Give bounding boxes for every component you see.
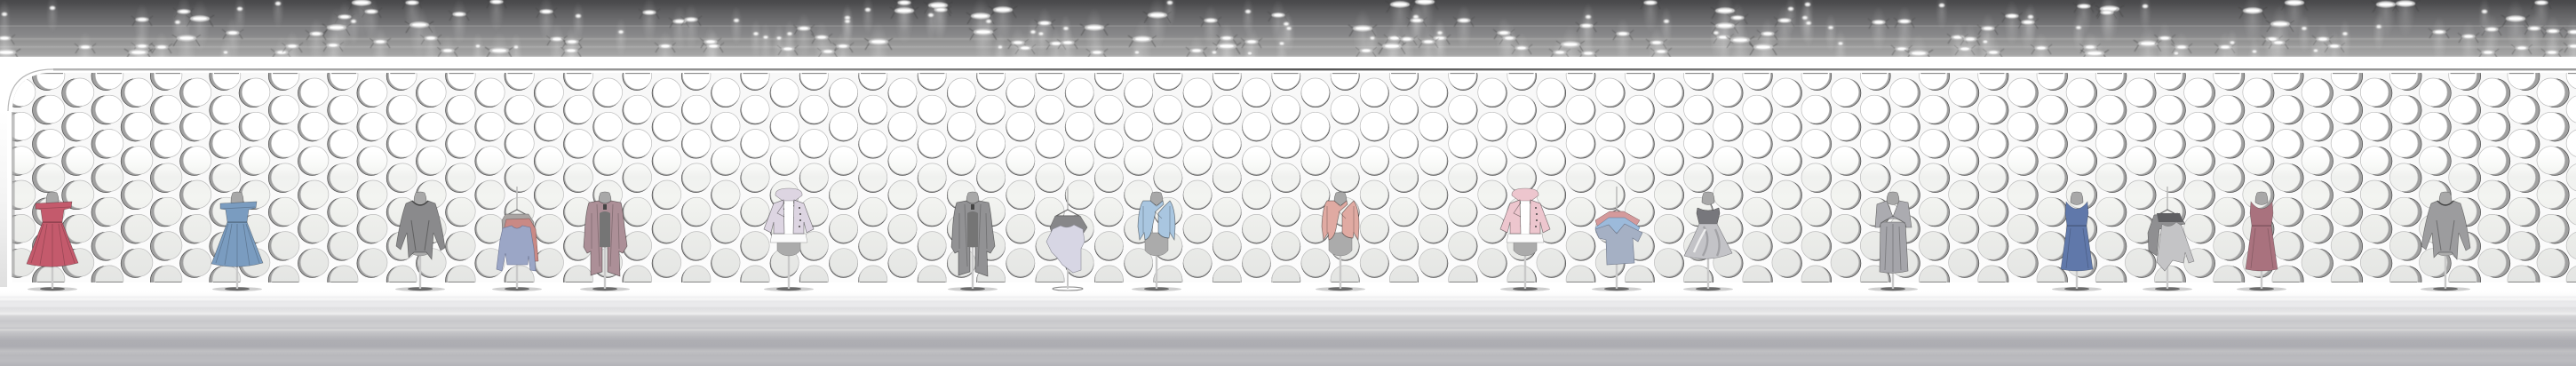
garment: hanging t-shirts xyxy=(1592,187,1642,291)
garment: salmon jacket xyxy=(1316,192,1365,291)
garment: blue dress xyxy=(211,192,263,291)
garment: light blue jacket xyxy=(1132,192,1181,291)
perforated circle wall xyxy=(12,73,2576,282)
ceiling lights xyxy=(0,0,2576,57)
garment: blue sleeveless dress xyxy=(2052,192,2102,291)
rounded wall corner outline xyxy=(8,69,53,111)
garment: pink collared jacket xyxy=(1500,188,1550,291)
mannequins and garments xyxy=(27,187,2470,291)
garment: mauve sleeveless dress xyxy=(2237,192,2286,291)
garment: grey v-neck dress xyxy=(1868,192,1918,291)
garment: hanging pale shirt xyxy=(1046,187,1087,290)
garment: silver party dress xyxy=(1683,192,1733,291)
garment: long mauve coat xyxy=(580,192,630,291)
garment: long grey coat xyxy=(948,192,998,291)
garment: hanging stack, blue sweater xyxy=(492,187,542,291)
garment: grey blouse right xyxy=(2421,192,2470,291)
ceiling band xyxy=(0,0,2576,57)
floor band xyxy=(0,291,2576,366)
garment: hanging grey blouse xyxy=(2143,187,2194,291)
wall top rail xyxy=(53,68,2576,70)
left side column fade xyxy=(0,111,7,287)
garment: lilac collared jacket xyxy=(764,188,814,291)
garment: grey long-sleeve top xyxy=(395,192,445,291)
garment: red dress xyxy=(27,192,78,291)
left wall pillar xyxy=(12,112,15,277)
